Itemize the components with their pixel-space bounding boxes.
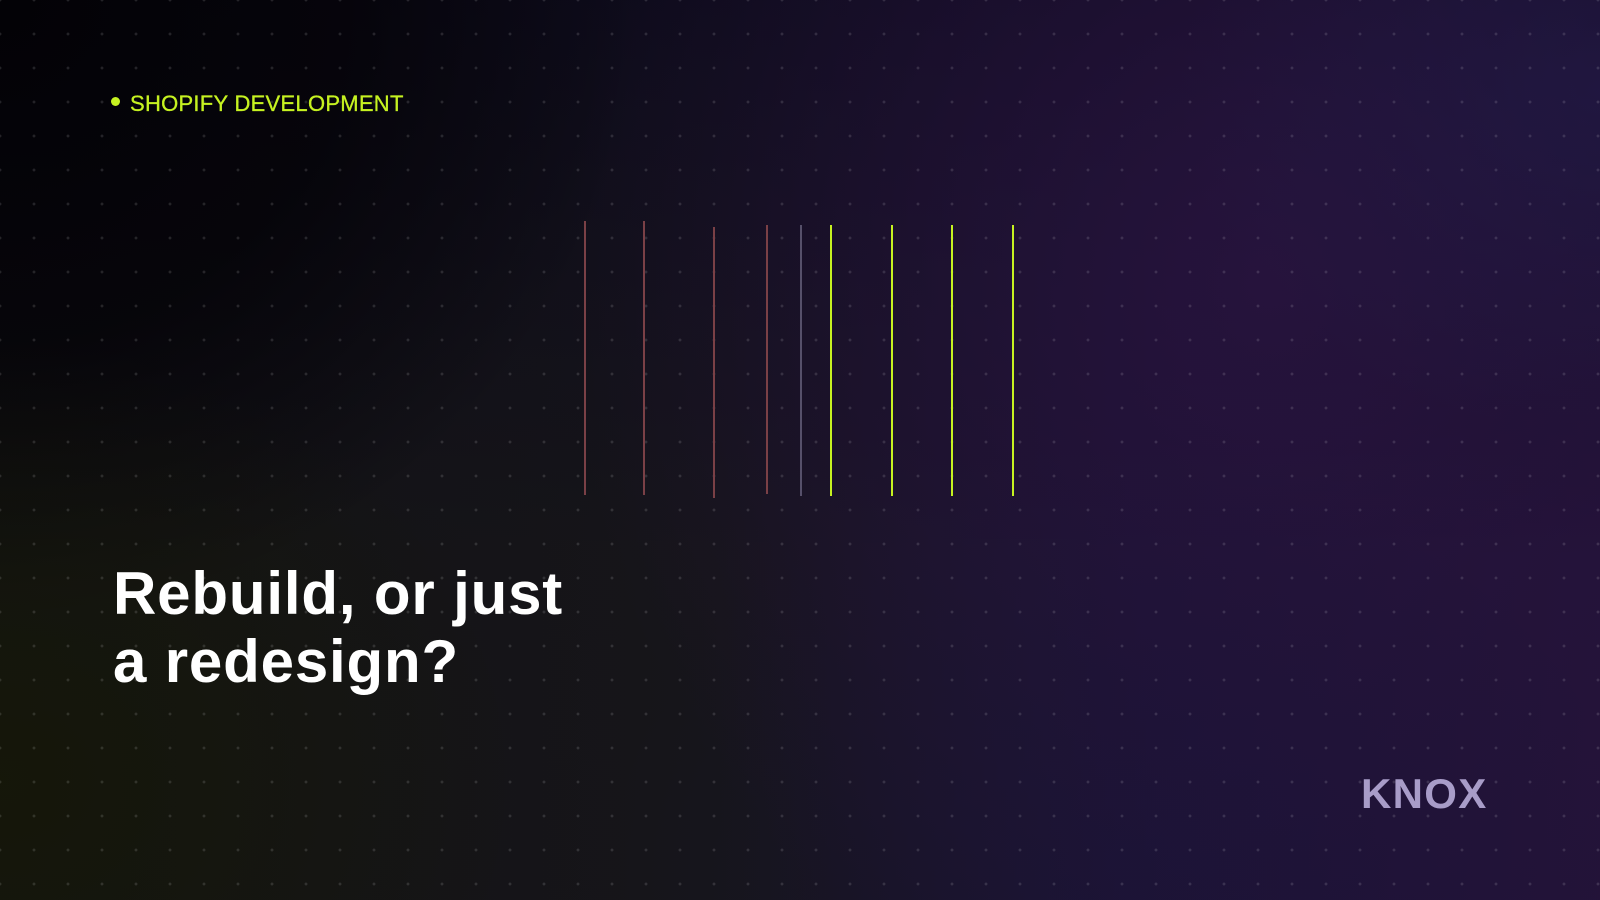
title xyxy=(113,560,563,695)
red-toned lines xyxy=(585,221,767,498)
grey line xyxy=(800,225,802,496)
title: a redesign? xyxy=(113,628,459,695)
title: Rebuild, or just xyxy=(113,560,563,627)
logo: KNOX: KNOX xyxy=(1361,770,1488,817)
lime lines xyxy=(831,225,1013,496)
icon: eyebrow bullet dot xyxy=(111,96,120,106)
eyebrow label: SHOPIFY DEVELOPMENT xyxy=(130,91,404,116)
eyebrow: Shopify Development xyxy=(111,91,404,116)
